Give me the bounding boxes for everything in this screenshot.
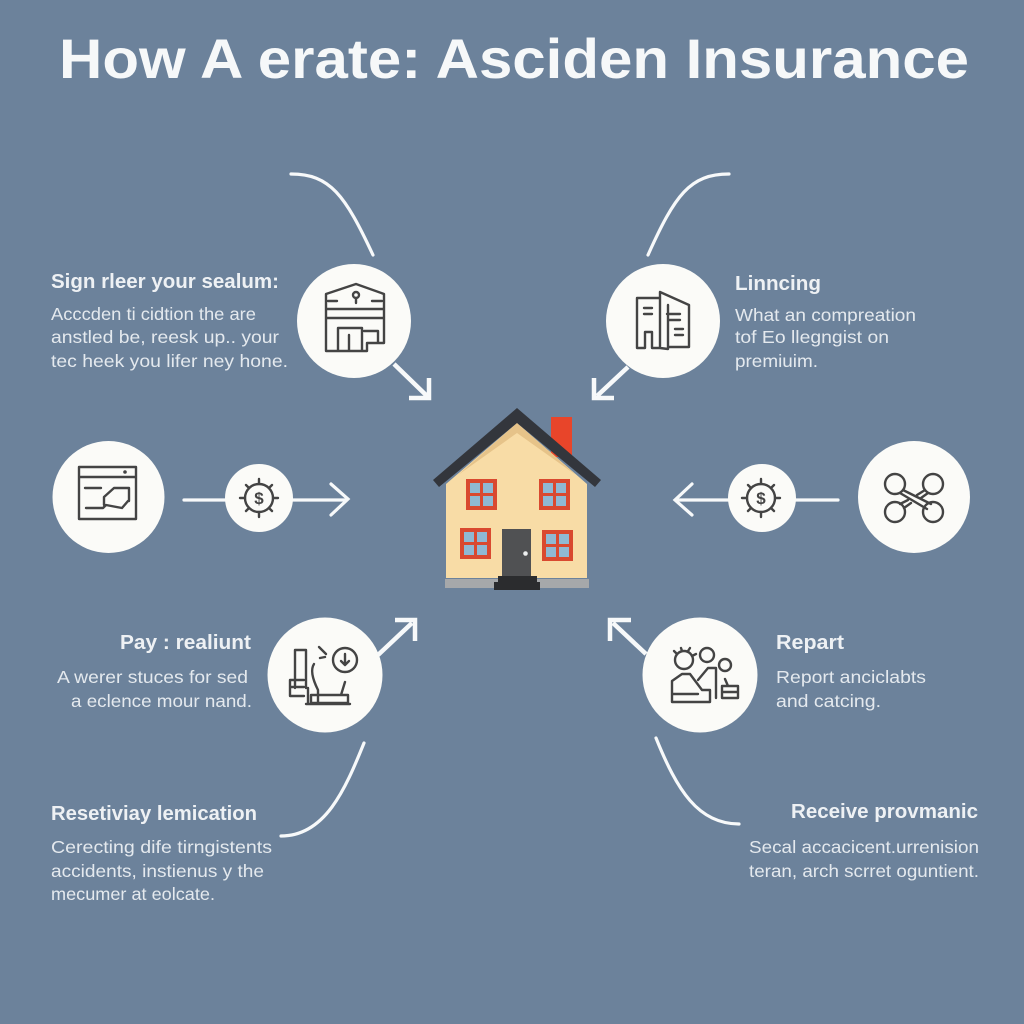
chimney	[551, 417, 572, 457]
house body	[446, 423, 587, 578]
door steps	[494, 576, 540, 590]
panel: top left step	[51, 174, 429, 398]
text block: receive: Receive provmanic	[791, 801, 978, 823]
house illustration	[433, 408, 601, 590]
text block: pay: a eclence mour nand.	[71, 691, 252, 711]
window: lower right	[542, 530, 573, 561]
arrow: bottom left to house	[378, 620, 415, 655]
window: upper right	[539, 479, 570, 510]
foundation	[445, 579, 589, 588]
text block: sign up: Acccden ti cidtion the are	[51, 304, 256, 324]
text block: sign up: Sign rleer your sealum:	[51, 271, 279, 293]
text block: sign up: anstled be, reesk up.. your	[51, 327, 279, 347]
text block: pay	[57, 632, 252, 711]
panel: right step	[675, 441, 970, 553]
icon circle: browser window	[52, 441, 164, 553]
panel: top right step	[594, 174, 916, 398]
text block: resetiviay: Cerecting dife tirngistents	[51, 837, 272, 857]
curved connector: top left	[291, 174, 373, 255]
icon circle: building	[297, 264, 411, 378]
icon circle: dollar gear	[728, 464, 796, 532]
text block: repart: Repart	[776, 632, 844, 654]
text block: repart: and catcing.	[776, 691, 881, 711]
arrow: top right to house	[594, 367, 628, 398]
text block: pay: A werer stuces for sed	[57, 667, 248, 687]
curved connector: bottom right	[656, 738, 739, 824]
text block: linncing: Linncing	[735, 273, 821, 295]
roof	[433, 408, 601, 487]
window: upper left	[466, 479, 497, 510]
icon circle: person at desk	[268, 618, 382, 732]
text block: linncing	[735, 273, 916, 371]
text block: linncing: What an compreation	[735, 305, 916, 325]
arrow: bottom right to house	[610, 620, 646, 654]
icon circle: dollar gear: $	[254, 489, 264, 508]
text block: linncing: premiuim.	[735, 351, 818, 371]
text block: sign up: tec heek you lifer ney hone.	[51, 351, 288, 371]
text block: repart: Report anciclabts	[776, 667, 926, 687]
text block: receive: Secal accacicent.urrenision	[749, 837, 979, 857]
text block: resetiviay: Resetiviay lemication	[51, 803, 257, 825]
text block: repart	[776, 632, 926, 711]
text block: pay: Pay : realiunt	[120, 632, 251, 654]
arrow head: left	[331, 484, 348, 515]
arrow head: right	[675, 484, 692, 515]
text block: resetiviay	[51, 803, 272, 904]
panel: left step	[52, 441, 348, 553]
arrow: top left to house	[394, 364, 429, 398]
icon circle: crossed links	[858, 441, 970, 553]
panel: bottom left step	[51, 618, 415, 904]
icon circle: office buildings	[606, 264, 720, 378]
text block: resetiviay: accidents, instienus y the	[51, 861, 264, 881]
window: lower left	[460, 528, 491, 559]
panel: bottom right step	[610, 618, 979, 881]
text block: linncing: tof Eo llegngist on	[735, 327, 889, 347]
door	[502, 529, 531, 576]
text block: sign up	[51, 271, 288, 371]
curved connector: bottom left	[281, 743, 364, 836]
text block: receive	[749, 801, 979, 881]
icon circle: people	[642, 618, 758, 732]
icon circle: dollar gear	[225, 464, 293, 532]
text block: resetiviay: mecumer at eolcate.	[51, 884, 215, 904]
title: How A erate: Asciden Insurance	[59, 27, 969, 90]
roof shadow	[458, 423, 576, 475]
connector line: right	[677, 498, 838, 502]
connector line: left	[184, 498, 346, 502]
icon circle: dollar gear: $	[756, 489, 766, 508]
curved connector: top right	[648, 174, 729, 255]
text block: receive: teran, arch scrret oguntient.	[749, 861, 979, 881]
